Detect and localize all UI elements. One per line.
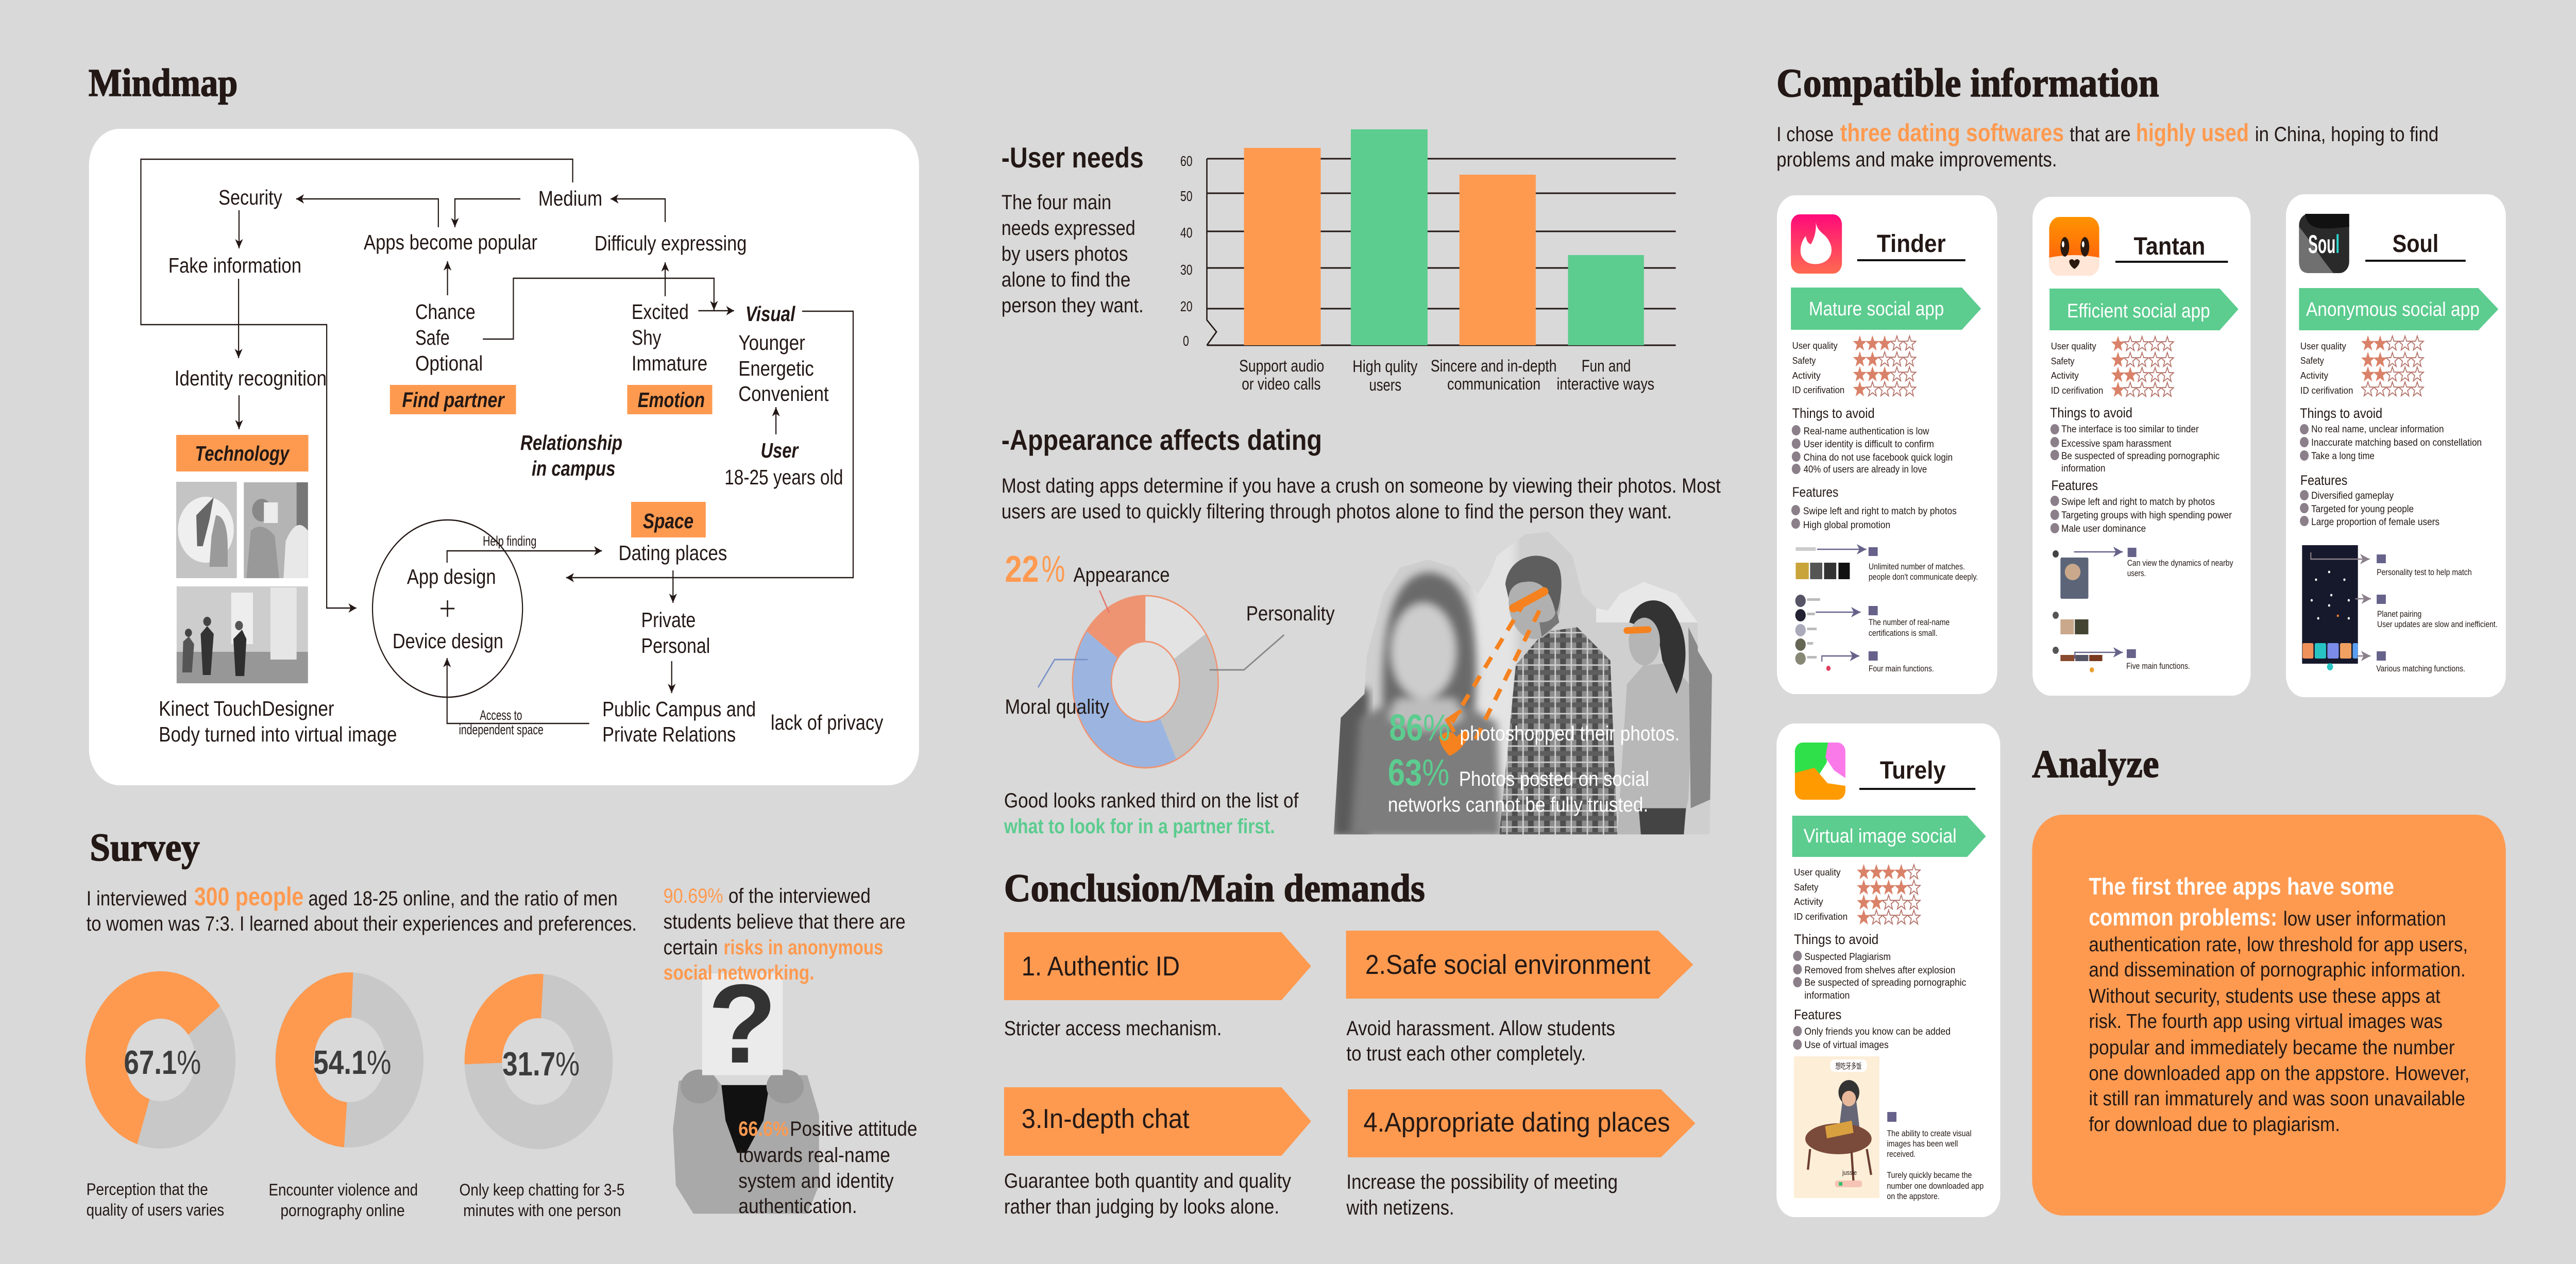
panel: analysis text: and dissemination of pornographic information. (2089, 958, 2466, 981)
features list (1791, 484, 1957, 530)
panel: analysis text: The first three apps have some (2089, 873, 2394, 900)
bar chart: user needs: communication (1447, 375, 1540, 394)
donut chart: what to look for in a partner: 22 (1005, 549, 1039, 590)
things to avoid list: Be suspected of spreading pornographic (1804, 977, 1967, 988)
text block: 66.6% positive attitude: system and identity (738, 1169, 894, 1192)
screenshot annotations (2074, 548, 2233, 671)
text block: 90.69% risk statement: of the interviewed (728, 884, 871, 907)
donut chart: 67.1% (106, 995, 215, 1125)
star ratings (2300, 336, 2424, 396)
things to avoid list: Take a long time (2311, 450, 2375, 461)
heading: Compatible information: Compatible information (1776, 61, 2159, 105)
photo stats text: Photos posted on social (1459, 767, 1649, 790)
tag: Find partner (390, 385, 516, 414)
text block: 66.6% positive attitude (738, 1117, 917, 1218)
mindmap node labels: Relationship (520, 431, 622, 455)
text block: survey intro: I interviewed (87, 886, 187, 910)
card: Soul (2286, 194, 2506, 697)
text block: 66.6% positive attitude: 66.6% (738, 1117, 789, 1140)
things to avoid list: User identity is difficult to confirm (1804, 439, 1934, 449)
features list: Targeted for young people (2311, 503, 2414, 514)
things to avoid list (1792, 406, 1953, 475)
photo stats text: 63% (1388, 752, 1449, 794)
illustration notes: number one downloaded app (1887, 1182, 1984, 1191)
app name: Soul (2393, 230, 2438, 258)
demand 3: In-depth chat: Guarantee both quantity and quality (1004, 1169, 1291, 1192)
text block: user needs description: alone to find the (1002, 267, 1130, 291)
star ratings: Activity (1794, 896, 1823, 907)
donut captions: Only keep chatting for 3-5 (459, 1181, 624, 1200)
bar chart: user needs: Support audio (1239, 357, 1324, 376)
text block: appearance description (1002, 474, 1721, 523)
panel: analysis text: popular and immediately became the number (2089, 1036, 2455, 1059)
tag: Emotion (627, 385, 712, 414)
app name (1859, 757, 1975, 790)
mindmap node labels: Body turned into virtual image (159, 723, 397, 747)
text block: user needs description: needs expressed (1002, 216, 1136, 240)
app name: Tantan (2134, 233, 2205, 260)
text block: 90.69% risk statement: students believe that there are (664, 909, 906, 933)
card: Turely (1776, 723, 2000, 1217)
panel: analysis text: common problems: (2089, 904, 2277, 931)
heading: Conclusion/Main demands: Conclusion/Main demands (1004, 867, 1425, 910)
panel: analysis text: for download due to plagiarism. (2089, 1113, 2340, 1136)
things to avoid list: information (2061, 463, 2106, 474)
screenshot annotations: people don't communicate deeply. (1869, 572, 1978, 582)
screenshot annotations: Various matching functions. (2376, 664, 2465, 673)
text block: survey intro: aged 18-25 online, and the ratio of men (309, 886, 618, 910)
text block: compatible intro: in China, hoping to find (2255, 122, 2438, 146)
screenshot annotations: users. (2127, 569, 2146, 578)
heading: User needs: -User needs (1002, 141, 1144, 174)
card: Tantan (2032, 197, 2250, 696)
bar chart: user needs: 30 (1180, 262, 1193, 278)
mindmap node labels: Excited (632, 300, 689, 324)
icon: Soul (2299, 214, 2349, 273)
mindmap node labels: 18-25 years old (724, 466, 843, 490)
text block: user needs description (1002, 190, 1144, 317)
heading: Appearance affects dating: -Appearance affects dating (1002, 424, 1322, 456)
text block: survey intro: to women was 7:3. I learned about their experiences and preferences. (87, 912, 637, 935)
panel: analysis text: one downloaded app on the appstore. However, (2089, 1061, 2469, 1085)
mindmap node labels: Medium (538, 187, 602, 211)
things to avoid list: Things to avoid (1794, 932, 1878, 947)
star ratings: Safety (2300, 355, 2324, 366)
demand 4: Appropriate dating places: Increase the possibility of meeting (1346, 1170, 1618, 1193)
text block: user needs description: person they want. (1002, 293, 1144, 317)
features list: Swipe left and right to match by photos (2061, 496, 2215, 507)
features list (2050, 478, 2232, 534)
icon: Turely (1795, 743, 1845, 800)
things to avoid list: Excessive spam harassment (2061, 438, 2171, 449)
heading: Mindmap: Mindmap (89, 61, 238, 105)
mindmap node labels: Apps become popular (364, 231, 537, 255)
mindmap node labels: Safe (415, 326, 450, 350)
illustration notes: Turely quickly became the (1887, 1171, 1972, 1180)
text block: survey intro: 300 people (194, 882, 303, 911)
app name (2365, 230, 2466, 262)
bar chart: user needs: or video calls (1242, 375, 1320, 394)
tag: Emotion: Emotion (638, 389, 705, 412)
things to avoid list: Be suspected of spreading pornographic (2061, 450, 2220, 461)
features list: High global promotion (1803, 519, 1890, 530)
screenshot annotations: Unlimited number of matches. (1869, 562, 1965, 571)
bar chart: user needs: Fun and (1582, 357, 1631, 376)
text block: compatible intro: highly used (2136, 120, 2249, 147)
mindmap node labels: Convenient (738, 382, 829, 406)
bar chart: user needs: users (1369, 376, 1401, 395)
screenshot annotations: User updates are slow and inefficient. (2377, 620, 2498, 629)
star ratings: User quality (2051, 341, 2096, 351)
star ratings: Activity (2051, 370, 2079, 381)
illustration notes: images has been well (1887, 1139, 1958, 1149)
demand 3: In-depth chat (1004, 1087, 1311, 1218)
screenshot annotations: The number of real-name (1869, 618, 1950, 627)
panel: analysis text: authentication rate, low threshold for app users, (2089, 933, 2468, 956)
donut chart: 31.7%: 31.7% (502, 1045, 580, 1083)
star ratings: ID cerifivation (1792, 384, 1844, 395)
screenshot annotations: certifications is small. (1869, 629, 1938, 638)
heading: Survey: Survey (90, 826, 200, 869)
mindmap node labels: Fake information (168, 254, 301, 278)
mindmap node labels: Optional (415, 352, 483, 376)
tag: Find partner: Find partner (402, 389, 505, 412)
mindmap node labels: Difficuly expressing (595, 232, 747, 256)
donut chart: what to look for in a partner: Personality (1246, 601, 1335, 625)
text block: compatible intro: three dating softwares (1840, 120, 2064, 147)
things to avoid list (2050, 405, 2220, 474)
things to avoid list: The interface is too similar to tinder (2061, 424, 2199, 434)
mindmap node labels: Chance (415, 300, 476, 324)
donut captions: pornography online (280, 1202, 405, 1220)
bar chart: user needs: Sincere and in-depth (1431, 357, 1557, 376)
demand 2: Safe social environment: to trust each other completely. (1346, 1041, 1586, 1065)
bar chart: user needs: High qulity (1352, 358, 1418, 376)
star ratings: Safety (2051, 356, 2075, 366)
features list (2300, 473, 2439, 527)
text block: 90.69% risk statement: certain (664, 935, 718, 959)
donut chart: 67.1%: 67.1% (124, 1043, 201, 1081)
tag arrow: Anonymous social app (2306, 299, 2480, 321)
text block: good looks ranking (1004, 788, 1299, 838)
donut captions (87, 1181, 624, 1220)
mindmap node labels: Private Relations (602, 723, 736, 747)
mindmap node labels (159, 186, 883, 747)
text block: compatible intro: problems and make improvements. (1776, 147, 2057, 171)
features list: Only friends you know can be added (1804, 1026, 1951, 1037)
things to avoid list: Things to avoid (2300, 406, 2382, 421)
mindmap node labels: Personal (641, 634, 710, 658)
donut captions: minutes with one person (463, 1202, 621, 1220)
icon: Soul: Soul (2308, 230, 2340, 259)
demand 3: In-depth chat: rather than judging by looks alone. (1004, 1194, 1279, 1218)
app name: Turely (1880, 757, 1946, 784)
text block: compatible intro: I chose (1776, 122, 1834, 146)
things to avoid list: Things to avoid (1792, 406, 1875, 421)
tag arrow (1792, 816, 1986, 857)
text block: 66.6% positive attitude: authentication. (738, 1194, 857, 1218)
text block: compatible intro (1776, 120, 2438, 171)
demand 1: Authentic ID: Stricter access mechanism. (1004, 1016, 1222, 1040)
demand 2: Safe social environment: 2.Safe social environment (1365, 950, 1651, 980)
screenshot annotations: Five main functions. (2126, 662, 2190, 671)
mindmap node labels: Help finding (483, 533, 536, 549)
tag arrow: Efficient social app (2067, 300, 2210, 322)
things to avoid list: China do not use facebook quick login (1804, 452, 1953, 463)
heading: Analyze: Analyze (2032, 743, 2159, 786)
connector lines and arrows (141, 159, 853, 723)
star ratings: User quality (1792, 340, 1838, 351)
app screenshot: planet screen (2302, 545, 2358, 670)
star ratings (1792, 336, 1916, 396)
demand 1: Authentic ID: 1. Authentic ID (1022, 952, 1180, 982)
donut chart: what to look for in a partner: % (1042, 549, 1065, 590)
star ratings (1794, 865, 1920, 924)
app name: Tinder (1877, 230, 1946, 258)
mindmap node labels: Public Campus and (602, 698, 756, 721)
photo: shadow on projection circle (176, 482, 237, 578)
tag arrow: Mature social app (1809, 298, 1944, 320)
text block: survey intro (87, 882, 637, 935)
mindmap node labels: Younger (738, 331, 805, 355)
panel: analysis text (2032, 815, 2506, 1216)
photo stats text: networks cannot be fully trusted. (1388, 793, 1648, 816)
donut chart: 54.1%: 54.1% (313, 1043, 391, 1081)
illustration: virtual avatar at table: jussie (1842, 1169, 1857, 1176)
features list: Targeting groups with high spending power (2061, 510, 2232, 520)
features list: Use of virtual images (1804, 1039, 1889, 1050)
mindmap node labels: Private (641, 609, 696, 632)
panel: mindmap (89, 129, 919, 785)
things to avoid list: information (1804, 990, 1850, 1001)
text block: user needs description: The four main (1002, 190, 1111, 214)
demand 4: Appropriate dating places (1346, 1089, 1696, 1219)
text block: 90.69% risk statement: social networking. (664, 960, 815, 984)
features list: Features (2300, 473, 2347, 488)
things to avoid list: Suspected Plagiarism (1804, 951, 1891, 962)
mindmap node labels: Access to (480, 707, 522, 723)
tag: Space: Space (643, 510, 693, 533)
things to avoid list (1793, 932, 1967, 1001)
donut chart: what to look for in a partner: Moral quality (1005, 695, 1109, 718)
mindmap node labels: Security (218, 186, 282, 210)
donut captions: quality of users varies (87, 1201, 224, 1220)
mindmap node labels: Dating places (618, 542, 727, 565)
tag arrow: Virtual image social (1804, 825, 1957, 847)
star ratings: Safety (1792, 355, 1816, 366)
panel: analysis text: low user information (2283, 907, 2446, 930)
features list: Large proportion of female users (2311, 516, 2439, 527)
text block: good looks ranking: Good looks ranked third on the list of (1004, 788, 1299, 812)
panel: analysis text: it still ran immaturely and was soon unavailable (2089, 1087, 2465, 1110)
photo: woman holding question mark sign (673, 960, 819, 1214)
donut chart: 31.7% (483, 996, 594, 1127)
things to avoid list: Removed from shelves after explosion (1804, 965, 1955, 975)
features list: Diversified gameplay (2311, 490, 2394, 501)
app screenshot (1795, 547, 1850, 671)
demand 4: Appropriate dating places: 4.Appropriate dating places (1363, 1108, 1670, 1138)
tag: Technology: Technology (195, 442, 290, 466)
app screenshot (2053, 550, 2103, 672)
text block: appearance description: users are used to quickly filtering through photos alone to find the person they want. (1002, 499, 1672, 523)
text block: user needs description: by users photos (1002, 242, 1128, 265)
star ratings: ID cerifivation (1794, 911, 1848, 922)
demand 2: Safe social environment: Avoid harassment. Allow students (1346, 1016, 1615, 1040)
photo: man looking back at another woman (1331, 527, 1715, 837)
star ratings: Safety (1794, 882, 1819, 892)
bar chart: user needs: 20 (1180, 299, 1193, 314)
circle: app and device design: Device design (393, 630, 503, 653)
features list: Features (2052, 478, 2098, 493)
mindmap node labels: Shy (632, 326, 661, 350)
star ratings (2051, 336, 2174, 396)
mindmap node labels: Energetic (738, 357, 814, 381)
things to avoid list: Things to avoid (2050, 405, 2132, 420)
panel: analysis text: risk. The fourth app using virtual images was (2089, 1009, 2443, 1033)
donut captions: Perception that the (87, 1181, 208, 1199)
screenshot annotations: Four main functions. (1869, 664, 1934, 673)
screenshot annotations (1816, 547, 1978, 673)
demand 1: Authentic ID (1004, 932, 1311, 1040)
mindmap node labels: independent space (459, 722, 544, 737)
things to avoid list: 40% of users are already in love (1804, 464, 1927, 475)
tag: Space (631, 502, 706, 537)
demand 4: Appropriate dating places: with netizens. (1346, 1195, 1454, 1219)
text block: appearance description: Most dating apps determine if you have a crush on someone by viewing their photos. Most (1002, 474, 1721, 497)
star ratings: User quality (1794, 867, 1841, 878)
bar chart: user needs (1180, 129, 1676, 395)
bar chart: user needs: 40 (1180, 225, 1193, 241)
photo: woman holding question mark sign: ? (708, 960, 777, 1086)
screenshot annotations (2311, 552, 2498, 673)
tag arrow (2299, 288, 2498, 330)
features list (1793, 1007, 1951, 1050)
mindmap node labels: Kinect TouchDesigner (159, 697, 334, 721)
star ratings: ID cerifivation (2051, 385, 2103, 396)
screenshot annotations: Can view the dynamics of nearby (2127, 559, 2233, 568)
demand 3: In-depth chat: 3.In-depth chat (1022, 1104, 1190, 1134)
illustration notes: on the appstore. (1887, 1192, 1940, 1201)
star ratings: User quality (2300, 341, 2346, 351)
things to avoid list (2300, 406, 2482, 461)
things to avoid list: Inaccurate matching based on constellation (2311, 437, 2482, 448)
icon: Tinder flame (1791, 214, 1842, 274)
features list: Features (1792, 484, 1838, 500)
donut chart: what to look for in a partner: Appearance (1073, 563, 1170, 586)
mindmap node labels: Visual (745, 302, 796, 326)
star ratings: Activity (1792, 370, 1821, 381)
mindmap node labels: lack of privacy (771, 711, 883, 735)
mindmap node labels: in campus (532, 457, 616, 481)
star ratings: Activity (2300, 370, 2329, 381)
tag: Technology (176, 435, 309, 471)
features list: Swipe left and right to match by photos (1803, 505, 1957, 516)
screenshot annotations: Planet pairing (2377, 610, 2421, 619)
app name (2115, 233, 2228, 263)
donut chart: 54.1% (294, 995, 404, 1125)
things to avoid list: No real name, unclear information (2311, 424, 2444, 434)
tag arrow (2049, 289, 2239, 330)
features list: Male user dominance (2061, 523, 2146, 534)
photo: people in front of interactive wall (177, 586, 308, 683)
bar chart: user needs: interactive ways (1557, 375, 1654, 394)
text block: good looks ranking: what to look for in a partner first. (1004, 814, 1275, 838)
illustration notes (1887, 1112, 1984, 1201)
illustration notes: The ability to create visual (1887, 1129, 1972, 1138)
donut captions: Encounter violence and (269, 1181, 418, 1200)
illustration: virtual avatar at table: 想吃牙多饭 (1835, 1061, 1861, 1070)
mindmap node labels: Identity recognition (175, 367, 327, 391)
tag arrow (1791, 288, 1981, 330)
text block: 90.69% risk statement: 90.69% (664, 884, 723, 907)
mindmap node labels: User (760, 439, 799, 463)
photo stats text (1388, 707, 1680, 816)
bar chart: user needs: 0 (1183, 333, 1189, 349)
text block: 90.69% risk statement (664, 884, 906, 984)
things to avoid list: Real-name authentication is low (1804, 426, 1929, 436)
photo stats text: 86% (1389, 707, 1450, 749)
illustration: virtual avatar at table (1794, 1056, 1879, 1198)
bar chart: user needs: 60 (1180, 154, 1193, 169)
text block: 66.6% positive attitude: towards real-name (738, 1143, 890, 1167)
panel: analysis text: Without security, students use these apps at (2089, 984, 2441, 1007)
features list: Features (1794, 1007, 1841, 1022)
card: Tinder (1777, 195, 1997, 694)
screenshot annotations: Personality test to help match (2377, 568, 2472, 577)
photo stats text: photoshopped their photos. (1460, 721, 1680, 745)
donut chart: what to look for in a partner (1005, 549, 1335, 768)
bar chart: user needs: 50 (1180, 189, 1193, 204)
demand 2: Safe social environment (1346, 931, 1693, 1065)
text block: 66.6% positive attitude: Positive attitude (790, 1117, 917, 1140)
illustration notes: received. (1887, 1150, 1916, 1159)
circle: app and device design: App design (407, 565, 496, 589)
icon: Tantan fox (2049, 217, 2099, 276)
mindmap node labels: Immature (632, 352, 707, 376)
star ratings: ID cerifivation (2300, 385, 2353, 396)
text block: 90.69% risk statement: risks in anonymous (724, 935, 883, 959)
circle: app and device design (372, 520, 522, 697)
app name (1857, 230, 1965, 261)
text block: compatible intro: that are (2070, 122, 2131, 146)
photo: person with QR screen (244, 482, 308, 578)
